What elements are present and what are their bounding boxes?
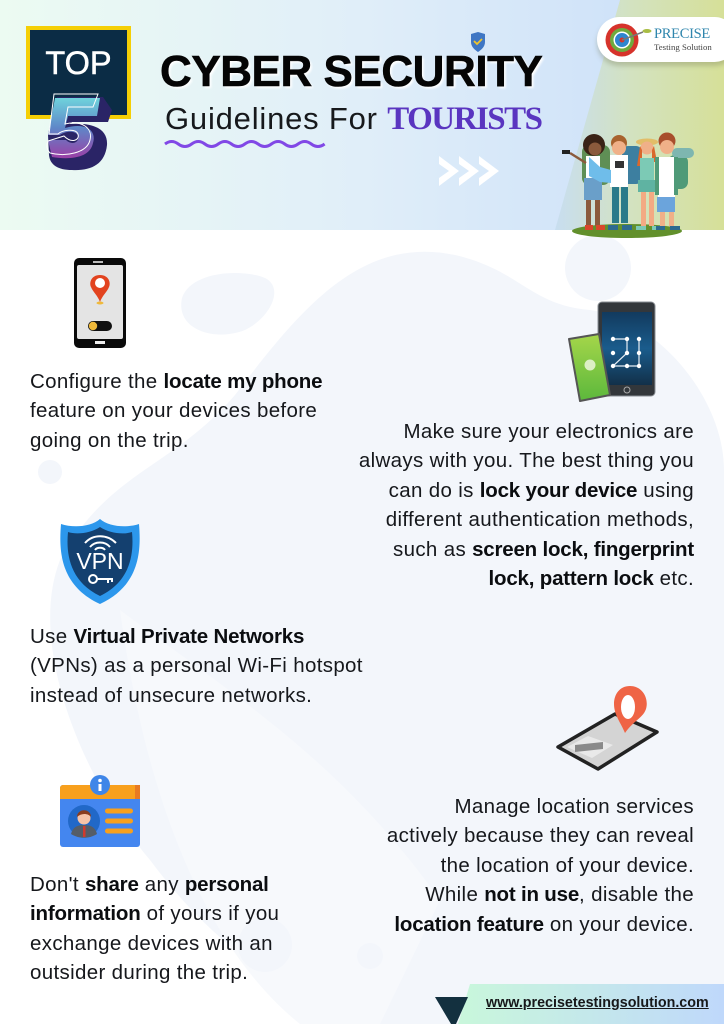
text: lock your device: different authentication methods, (386, 508, 694, 531)
icon: pattern lock phones (568, 302, 656, 402)
text: location services (387, 795, 694, 936)
text: location services: the location of your device. (441, 854, 694, 877)
text: locate my phone: Configure the locate my phone (30, 370, 322, 393)
text: locate my phone (30, 370, 322, 452)
text: location services: location feature on your device. (394, 913, 694, 936)
text: VPN: (VPNs) as a personal Wi-Fi hotspot (30, 654, 363, 677)
header band (0, 0, 724, 230)
text: lock your device: can do is lock your device using (389, 479, 694, 502)
text: lock your device: lock, pattern lock etc. (489, 567, 694, 590)
number 5 (46, 94, 112, 170)
arrows (439, 156, 499, 186)
top box: TOP (45, 45, 112, 81)
text: lock your device (359, 420, 694, 590)
icon: map with location pin (556, 686, 659, 771)
footer url: www.precisetestingsolution.com (486, 995, 709, 1011)
text: lock your device: such as screen lock, fingerprint (393, 538, 694, 561)
top box (26, 26, 131, 119)
logo target (606, 24, 652, 56)
text: lock your device: always with you. The best thing you (359, 449, 694, 472)
text: VPN: Use Virtual Private Networks (30, 625, 304, 648)
tourists illustration (562, 132, 694, 238)
icon: VPN shield: VPN (76, 548, 124, 574)
person 2 (611, 135, 627, 151)
person 1 (583, 134, 605, 156)
backpacks (582, 145, 610, 185)
map (589, 157, 611, 183)
text: VPN (30, 625, 363, 707)
logo (597, 17, 724, 62)
text: personal information: information of yours if you (30, 902, 279, 925)
text: personal information: Don't share any personal (30, 873, 269, 896)
text: location services: While not in use, disable the (425, 883, 694, 906)
subtitle: Guidelines For TOURISTS (165, 101, 542, 137)
wavy underline (164, 140, 326, 148)
person 3 (636, 138, 658, 146)
icon: personal ID card (60, 775, 140, 847)
text: locate my phone: going on the trip. (30, 429, 189, 452)
logo name: PRECISE (654, 26, 710, 42)
text: location services: actively because they can reveal (387, 824, 694, 847)
grass (572, 224, 682, 238)
text: location services: Manage location services (455, 795, 694, 818)
text: VPN: instead of unsecure networks. (30, 684, 312, 707)
icon: shield check (471, 32, 485, 52)
logo tagline: Testing Solution (654, 42, 712, 52)
text: locate my phone: feature on your devices before (30, 399, 317, 422)
text: lock your device: Make sure your electronics are (404, 420, 694, 443)
person 4 (658, 132, 676, 150)
text: personal information: exchange devices with an (30, 932, 273, 955)
text: personal information: outsider during the trip. (30, 961, 248, 984)
text: personal information (30, 873, 279, 984)
title: CYBER SECURITY (160, 47, 542, 96)
icon: phone with location pin (74, 258, 126, 348)
icon: VPN shield (60, 519, 140, 604)
